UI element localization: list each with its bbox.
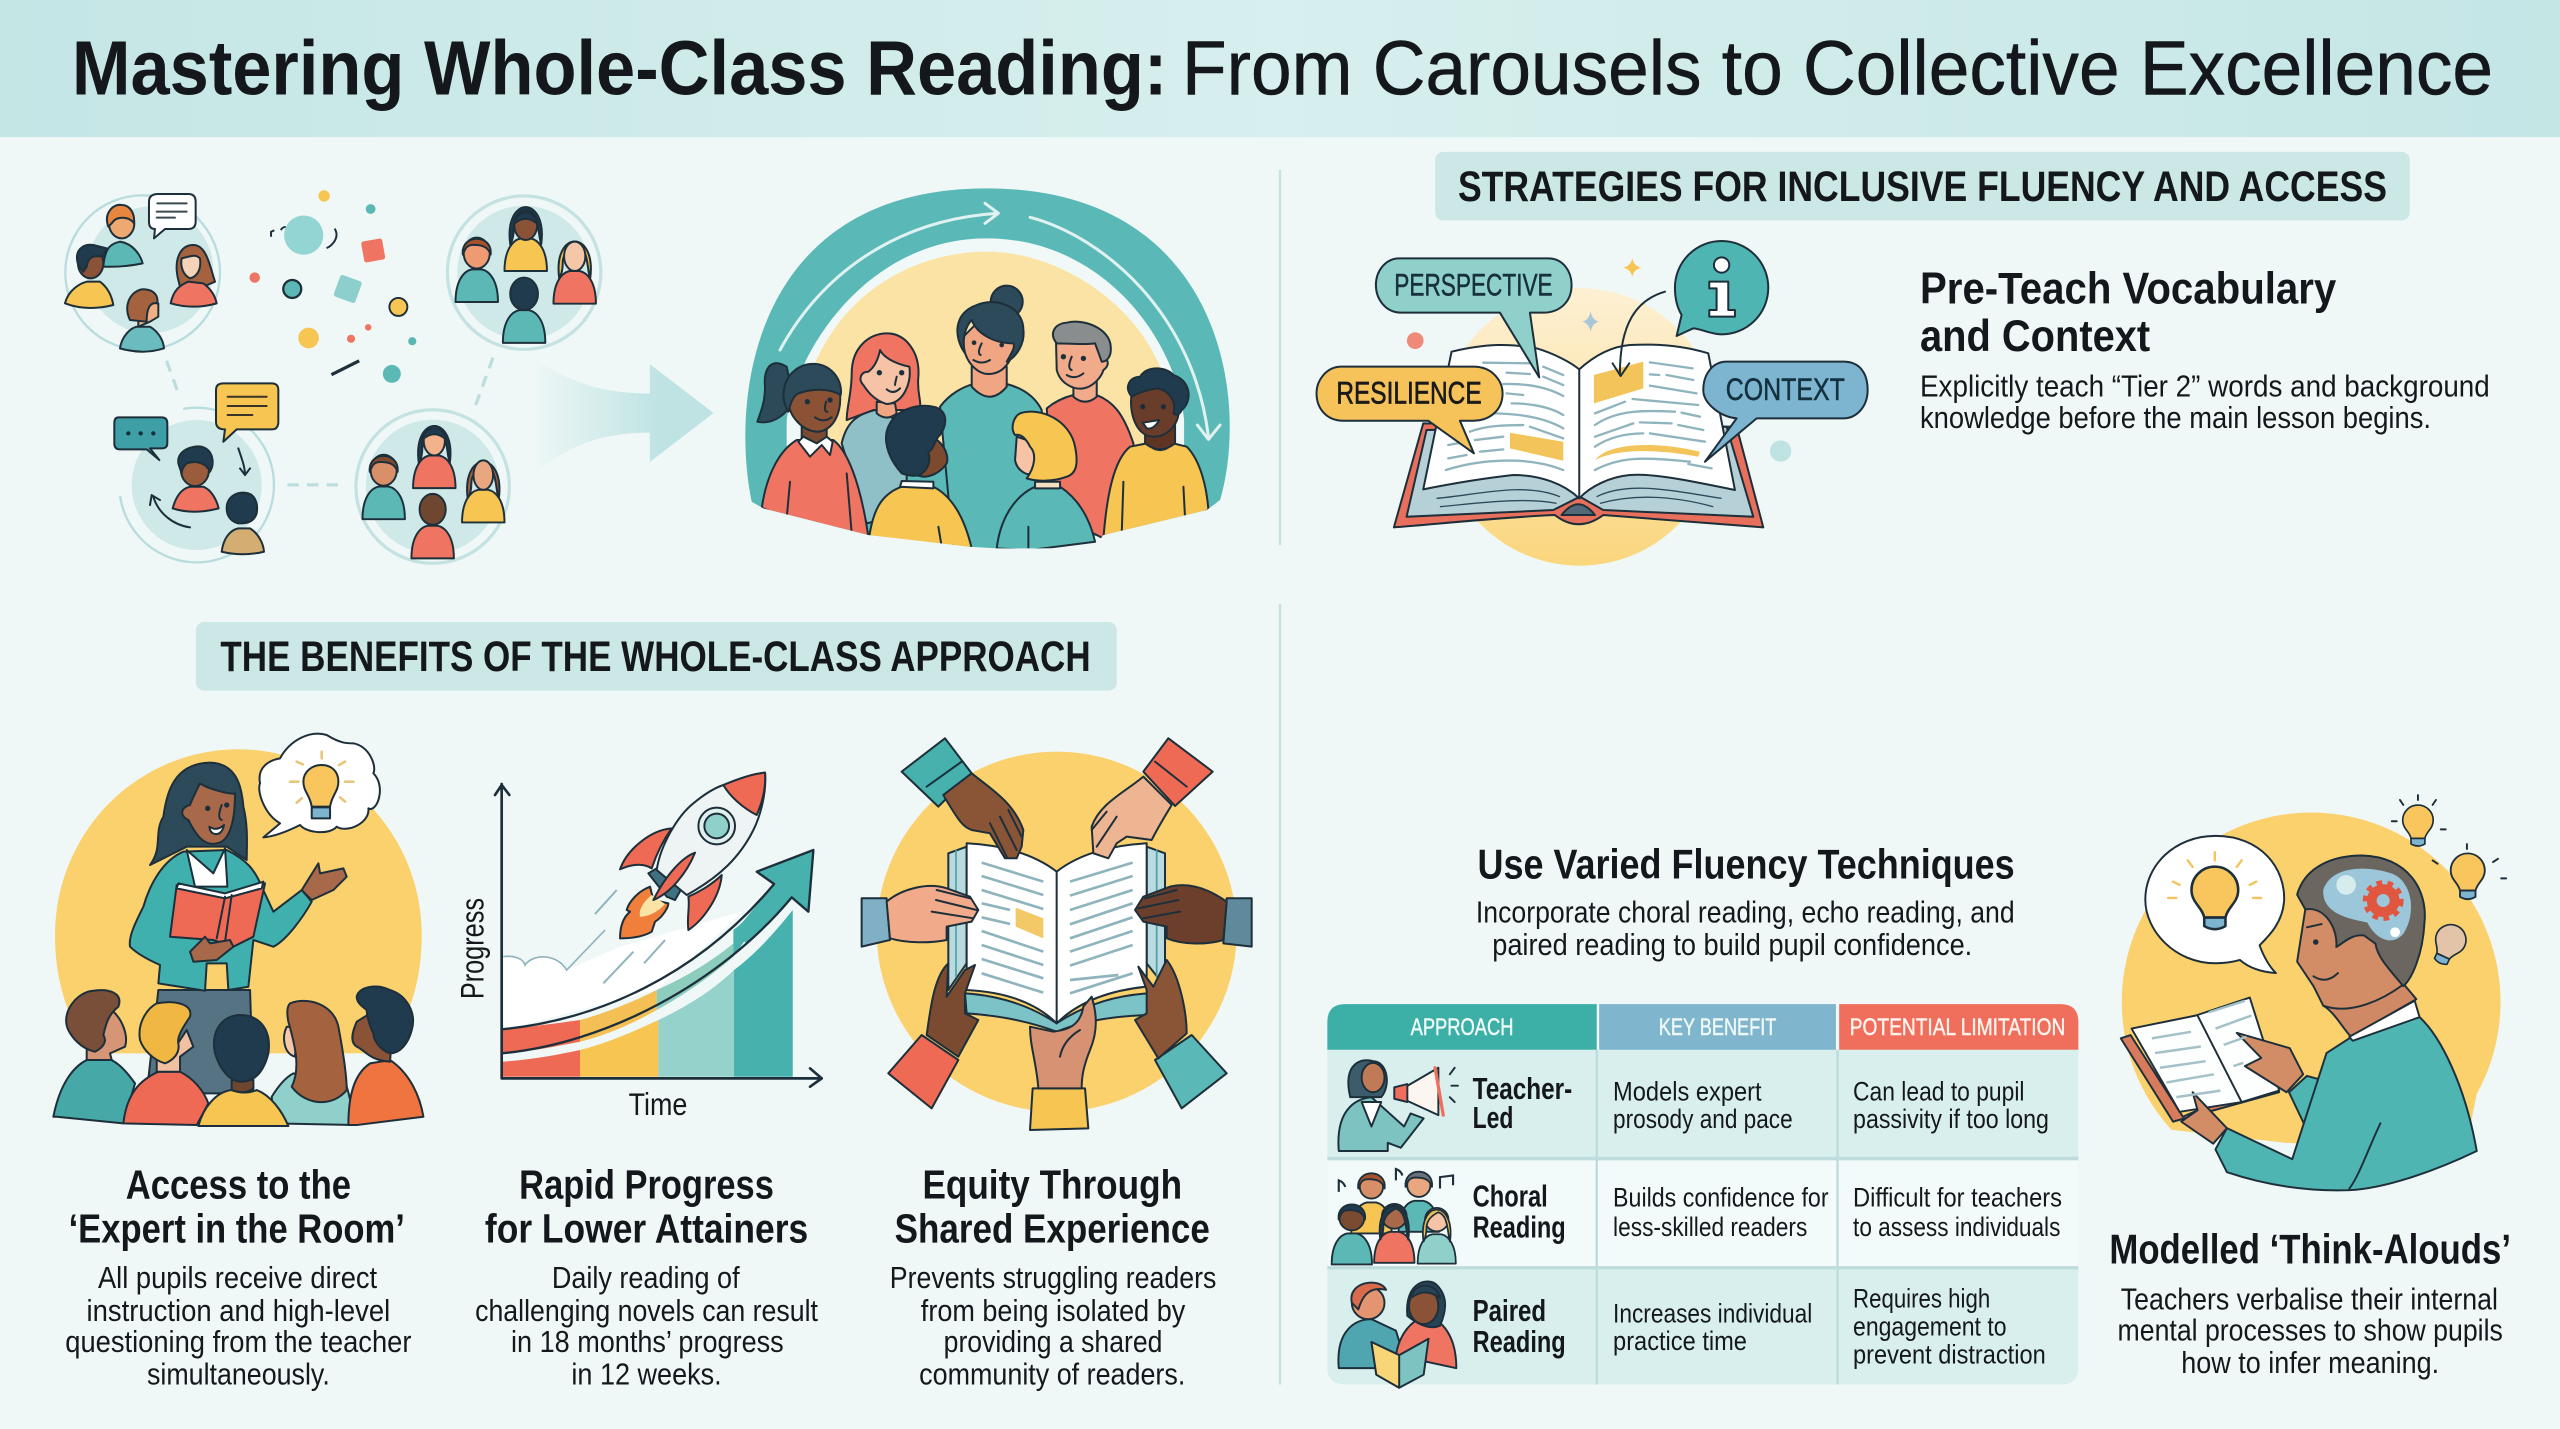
person: navy hair back — [869, 487, 972, 550]
arrow: carousel to whole class — [531, 356, 713, 470]
heading: benefits — [196, 622, 1117, 691]
row: choral reading: Reading — [1473, 1212, 1566, 1245]
text block: pre-teach vocabulary: Explicitly teach “Tier 2” words and background — [1920, 371, 2490, 404]
heading: strategies — [1435, 152, 2410, 220]
axis label: progress: Progress — [453, 898, 490, 999]
body — [2118, 1283, 2503, 1380]
panel: equity — [862, 738, 1252, 1391]
row backgrounds — [1327, 1050, 2078, 1384]
icon: teacher with megaphone — [1338, 1060, 1458, 1151]
title: Mastering Whole-Class Reading: — [72, 27, 1167, 112]
row: choral reading: Choral — [1473, 1181, 1548, 1214]
person: left girl — [762, 440, 868, 537]
brain gears — [2323, 869, 2411, 940]
teacher jacket — [130, 850, 312, 991]
yellow bubble — [216, 383, 278, 442]
hand: bottom left — [888, 1035, 958, 1108]
person: blonde back — [997, 487, 1095, 550]
body: mental processes to show pupils — [2118, 1314, 2503, 1347]
row: paired reading: Reading — [1473, 1326, 1566, 1359]
hand: top left — [902, 738, 972, 807]
body: community of readers. — [919, 1358, 1185, 1391]
body: in 18 months’ progress — [511, 1326, 784, 1359]
header: key benefit: KEY BENEFIT — [1659, 1014, 1776, 1041]
panel: rapid progress — [453, 773, 822, 1391]
neck and face — [2323, 963, 2416, 1037]
rocket — [620, 773, 765, 938]
heading: benefits: THE BENEFITS OF THE WHOLE-CLASS APPROACH — [220, 633, 1091, 680]
row: paired reading — [1338, 1281, 2046, 1388]
illustration: open book with word bubbles: RESILIENCE — [1336, 374, 1482, 410]
hand: bottom — [1030, 1088, 1088, 1130]
text block: fluency techniques — [1476, 840, 2015, 962]
book and hands — [2121, 998, 2303, 1144]
body: questioning from the teacher — [65, 1326, 411, 1359]
header: potential limitation — [1839, 1004, 2078, 1050]
row: teacher-led: Models expert — [1613, 1076, 1762, 1106]
row: teacher-led: Teacher- — [1473, 1073, 1572, 1106]
text block: pre-teach vocabulary: knowledge before the main lesson begins. — [1920, 402, 2431, 435]
person: right man — [1103, 443, 1208, 538]
teal bubble — [114, 417, 167, 460]
header: potential limitation: POTENTIAL LIMITATION — [1850, 1014, 2065, 1041]
row: paired reading: prevent distraction — [1853, 1339, 2046, 1369]
icon: pair reading — [1338, 1281, 1456, 1388]
pupils — [53, 987, 423, 1126]
hand: top right — [1143, 738, 1213, 806]
body: All pupils receive direct — [98, 1262, 378, 1295]
heading: Access to the — [126, 1161, 351, 1207]
body: from being isolated by — [921, 1295, 1186, 1328]
group circle 1 — [65, 194, 220, 352]
body: challenging novels can result — [475, 1295, 818, 1328]
row: paired reading: Requires high — [1853, 1284, 1990, 1314]
row: teacher-led: prosody and pace — [1613, 1104, 1793, 1134]
sun circle — [1441, 288, 1718, 566]
teacher face — [182, 783, 235, 844]
axis label: time: Time — [629, 1087, 687, 1122]
hand: left — [862, 898, 890, 947]
title continuation: From Carousels to Collective Excellence — [1182, 27, 2493, 112]
header: key benefit — [1599, 1004, 1836, 1050]
icon: info bubble — [1675, 241, 1768, 336]
row: teacher-led: Can lead to pupil — [1853, 1076, 2024, 1106]
heading — [69, 1161, 405, 1251]
body — [890, 1262, 1216, 1391]
row: teacher-led: Led — [1473, 1102, 1513, 1135]
header: approach: APPROACH — [1411, 1014, 1513, 1041]
speech bubble with bulb — [2145, 836, 2284, 973]
body — [475, 1262, 818, 1391]
illustration: teacher and pupils — [53, 734, 423, 1126]
hands — [190, 937, 233, 962]
dashed connectors — [167, 358, 493, 485]
hair — [2297, 856, 2425, 986]
hand: bottom right — [1155, 1035, 1227, 1108]
person: centre woman — [940, 384, 1042, 550]
heading: ‘Expert in the Room’ — [69, 1205, 405, 1251]
illustration: open book with word bubbles — [1317, 241, 1868, 566]
text block: fluency techniques: Use Varied Fluency Techniques — [1478, 840, 2015, 887]
curved arrow — [1613, 292, 1665, 376]
heading: for Lower Attainers — [485, 1205, 808, 1251]
thought bubble — [259, 734, 380, 837]
illustration: thinker with book — [2121, 795, 2506, 1190]
arch — [745, 188, 1230, 547]
header: approach — [1327, 1004, 1597, 1050]
heading: strategies: STRATEGIES FOR INCLUSIVE FLUENCY AND ACCESS — [1458, 163, 2387, 210]
group circle 2 — [447, 196, 601, 349]
teacher hair — [150, 763, 247, 865]
illustration: open book with word bubbles: CONTEXT — [1726, 372, 1845, 407]
body: how to infer meaning. — [2181, 1347, 2439, 1380]
illustration: whole class under arch — [745, 188, 1230, 550]
highlights — [1510, 362, 1700, 461]
trend arrow — [733, 850, 813, 943]
row: choral reading: Difficult for teachers — [1853, 1183, 2062, 1213]
body: in 12 weeks. — [571, 1358, 722, 1391]
page text lines — [1446, 362, 1712, 470]
table: approaches — [1327, 1004, 2078, 1388]
row: teacher-led: passivity if too long — [1853, 1104, 2049, 1134]
body: instruction and high-level — [87, 1295, 390, 1328]
row: choral reading — [1332, 1169, 2062, 1264]
heading: Rapid Progress — [519, 1161, 774, 1207]
text block: fluency techniques: Incorporate choral reading, echo reading, and — [1476, 896, 2015, 929]
bubble: context — [1703, 362, 1868, 462]
group circle 3 — [107, 383, 286, 575]
text block: pre-teach vocabulary: Pre-Teach Vocabulary — [1920, 265, 2337, 314]
row: teacher-led — [1338, 1060, 2049, 1151]
teacher trousers — [147, 990, 253, 1093]
icon: choir — [1332, 1172, 1456, 1264]
heading: Equity Through — [922, 1161, 1182, 1207]
text block: pre-teach vocabulary: and Context — [1920, 312, 2150, 361]
body: simultaneously. — [147, 1358, 330, 1391]
bubble labels: PERSPECTIVE — [1394, 268, 1553, 303]
body: Prevents struggling readers — [890, 1262, 1216, 1295]
axes — [495, 784, 822, 1087]
text block: fluency techniques: paired reading to build pupil confidence. — [1492, 929, 1972, 962]
row: paired reading: practice time — [1613, 1326, 1747, 1356]
row: paired reading: Paired — [1473, 1295, 1546, 1328]
heading — [895, 1161, 1210, 1251]
body: Daily reading of — [552, 1262, 740, 1295]
speech bubble white — [149, 194, 196, 238]
title banner — [0, 0, 2560, 137]
book edges — [948, 847, 967, 990]
floating bulbs — [2392, 795, 2506, 970]
chart: progress over time — [453, 773, 822, 1122]
body — [65, 1262, 411, 1391]
page edges — [1407, 427, 1753, 517]
group circle 4 — [356, 410, 509, 563]
row: paired reading: Increases individual — [1613, 1298, 1812, 1328]
row: choral reading: Builds confidence for — [1613, 1183, 1829, 1213]
person: grey hair man — [1047, 395, 1133, 538]
scattered shapes — [249, 190, 416, 383]
row: choral reading: less-skilled readers — [1613, 1212, 1807, 1242]
body: Teachers verbalise their internal — [2121, 1283, 2498, 1316]
hand: right — [1223, 898, 1252, 947]
row: choral reading: to assess individuals — [1853, 1212, 2060, 1242]
arch arrows — [780, 203, 1220, 439]
bubble: perspective — [1376, 258, 1572, 377]
panel: expert in the room — [53, 734, 423, 1391]
book pages — [967, 843, 1147, 1023]
body — [2216, 1017, 2477, 1190]
panel: think-alouds — [2109, 795, 2511, 1380]
illustration: small groups carousel — [65, 190, 601, 575]
illustration: hands holding book — [862, 738, 1252, 1130]
upper arm — [2289, 1076, 2325, 1127]
speed lines — [595, 890, 665, 983]
book cover — [1394, 423, 1763, 527]
pages — [1423, 345, 1735, 498]
row: paired reading: engagement to — [1853, 1311, 2007, 1341]
open book — [170, 883, 265, 947]
icon: music notes — [1339, 1169, 1453, 1192]
heading: Shared Experience — [895, 1205, 1210, 1251]
body: providing a shared — [944, 1326, 1162, 1359]
bubble: resilience — [1317, 367, 1503, 453]
heading — [485, 1161, 808, 1251]
person: red hair woman — [842, 410, 907, 523]
text block: pre-teach vocabulary — [1920, 265, 2490, 435]
